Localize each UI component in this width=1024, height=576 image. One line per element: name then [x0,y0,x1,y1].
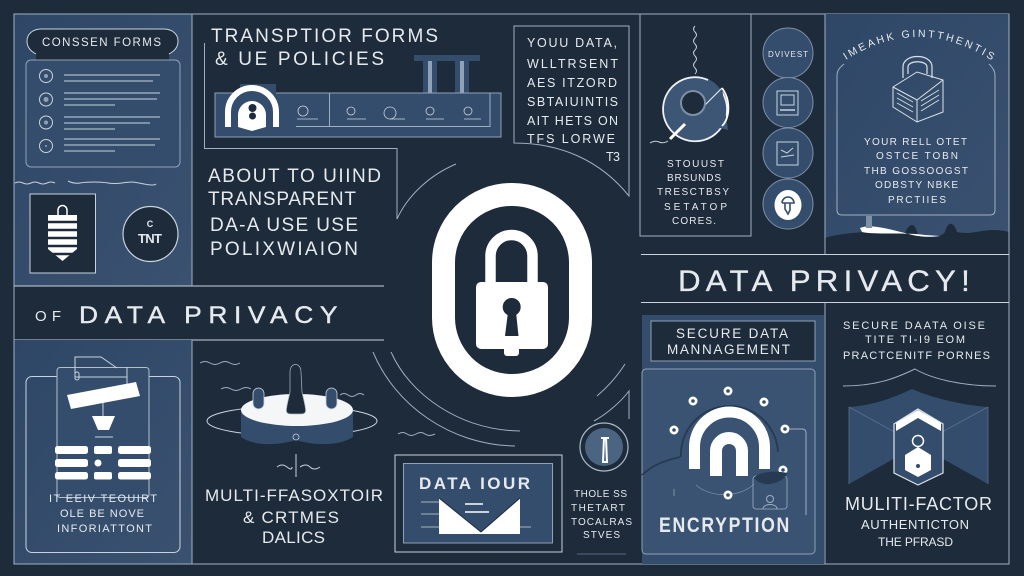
text block: your rell: THB GOSSOOGST [864,166,968,177]
icon column: circles [763,28,813,229]
panel: secure data management [642,315,824,564]
text block: multi-factor authentication: THE PFRASD [878,535,953,549]
encryption card: ENCRYPTION [659,514,791,537]
text block: multi-factor crimes: & CRTMES [243,508,339,527]
text block: brands: CORES. [672,216,716,227]
callout: your data: T3 [606,150,620,164]
small key icons [297,106,481,119]
text block: multi-factor crimes [205,486,383,547]
text block: multi-factor authentication: AUTHENTICTON [861,517,969,532]
callout: your data: TFS LORWE [527,132,615,146]
title band: data privacy [641,254,1009,302]
icon: hanging ring [650,26,728,143]
user box [753,472,787,509]
text block: brands: TRESCTBSY [657,187,729,198]
heading: secure data management: MANNAGEMENT [667,342,790,357]
icon: envelope [421,498,531,534]
panel: cube lock [826,14,1008,238]
icon: cube lock [893,56,943,122]
document card [26,357,180,552]
text block: brands: STOUUST [667,159,724,170]
text block: brands: BRSUNDS [667,173,721,184]
text block: information: INFORIATTONT [57,523,152,535]
icon: double arch [694,412,764,476]
title band: of data privacy [14,286,384,340]
ring dots [670,386,790,500]
heading: transparent forms and policies: & UE POLICIES [215,49,384,70]
text block: about transparent data use: DA-A USE USE [210,215,358,236]
small medallion icon [580,423,628,471]
icon: shield on envelope [849,389,988,485]
circle: divest [763,28,813,78]
panel: policy bar with lock [215,84,501,137]
text block: small notes: TOCALRAS [571,517,632,528]
text block: multi-factor authentication [845,494,992,549]
text block: small notes: THOLE SS [574,489,627,500]
decorative arcs around padlock [373,352,629,446]
heading: transparent forms and policies: TRANSPTIOR FORMS [211,26,438,47]
text block: about transparent data use: POLIXWIAION [210,239,358,260]
panel: hook and ring [640,14,751,236]
icon: disc device [200,362,435,477]
text block: brands: SETATOP [664,202,727,213]
icon: TNT circle: C [147,219,154,229]
text block: information: OLE BE NOVE [60,508,144,520]
text block: multi-factor crimes: DALICS [262,528,325,547]
icon: tilted bar and funnel [67,382,140,437]
consent form card [26,60,180,167]
text block: brands [657,159,729,227]
text block: your rell: PRCTIIES [888,195,946,206]
icon: striped badge [30,194,96,273]
heading: transparent forms and policies [211,26,438,70]
title band: of data privacy: DATA PRIVACY [79,302,344,329]
circle: document icon [763,128,813,178]
circle: screen icon [763,78,813,128]
text block: about transparent data use: ABOUT TO UIIND [208,166,381,187]
callout: your data: WLLTRSENT [527,57,618,71]
panel: data tour envelope [395,455,562,552]
icon: bolts [414,55,480,93]
circle: divest: DVIVEST [768,50,808,59]
text block: information: IT EEIV TEOUIRT [49,493,157,505]
dark ring and arcs [642,406,778,475]
text block: secure data use: TITE TI-I9 EOM [865,334,965,346]
encryption card [642,369,815,554]
icon: TNT circle: TNT [138,231,162,246]
text block: your rell: YOUR RELL OTET [864,137,967,148]
text block: small notes: STVES [583,530,620,541]
text block: about transparent data use: TRANSPARENT [208,189,356,210]
data rows [55,446,151,480]
text block: secure data use [843,320,990,362]
heading: secure data management: SECURE DATA [676,326,788,341]
icon: central padlock [444,194,580,386]
callout: your data: YOUU DATA, [527,36,617,50]
icon: TNT circle [123,206,178,262]
text block: small notes [571,489,632,541]
text block: secure data use: PRACTCENITF PORNES [843,350,990,362]
text block: information [49,493,157,535]
heading: secure data management [651,321,815,361]
text block: multi-factor crimes: MULTI-FFASOXTOIR [205,486,383,505]
text block: small notes: THETART [571,503,625,514]
decorative curve [843,369,996,386]
bracket frame around about text [204,43,456,219]
text block: your rell: ODBSTY NBKE [875,180,958,191]
landscape silhouette [825,216,1009,254]
panel: data tour envelope: DATA IOUR [419,474,530,493]
consent forms pill heading [27,29,178,60]
curved heading: IMEAHK GINTTHENTIS [843,30,994,60]
text block: multi-factor authentication: MULITI-FACTOR [845,494,992,514]
title band: of data privacy: OF [35,308,61,325]
callout: your data [514,26,629,196]
consent forms pill heading: CONSSEN FORMS [42,37,161,49]
callout: your data: AES ITZORD [527,76,617,90]
wavy divider [15,181,156,185]
text block: your rell: OSTCE TOBN [876,151,958,162]
callout: your data: AIT HETS ON [527,114,618,128]
callout: your data: SBTAIUINTIS [527,95,618,109]
panel: information document [14,340,192,564]
icon: arch lock [228,88,276,131]
text block: about transparent data use [208,166,381,260]
card outline [837,64,995,215]
circle: key icon [763,179,813,229]
title band: data privacy: DATA PRIVACY! [678,265,975,298]
text block: your rell [864,137,968,206]
panel: consent forms [14,14,192,286]
text block: secure data use: SECURE DAATA OISE [843,320,985,332]
divider lines [825,14,1009,564]
